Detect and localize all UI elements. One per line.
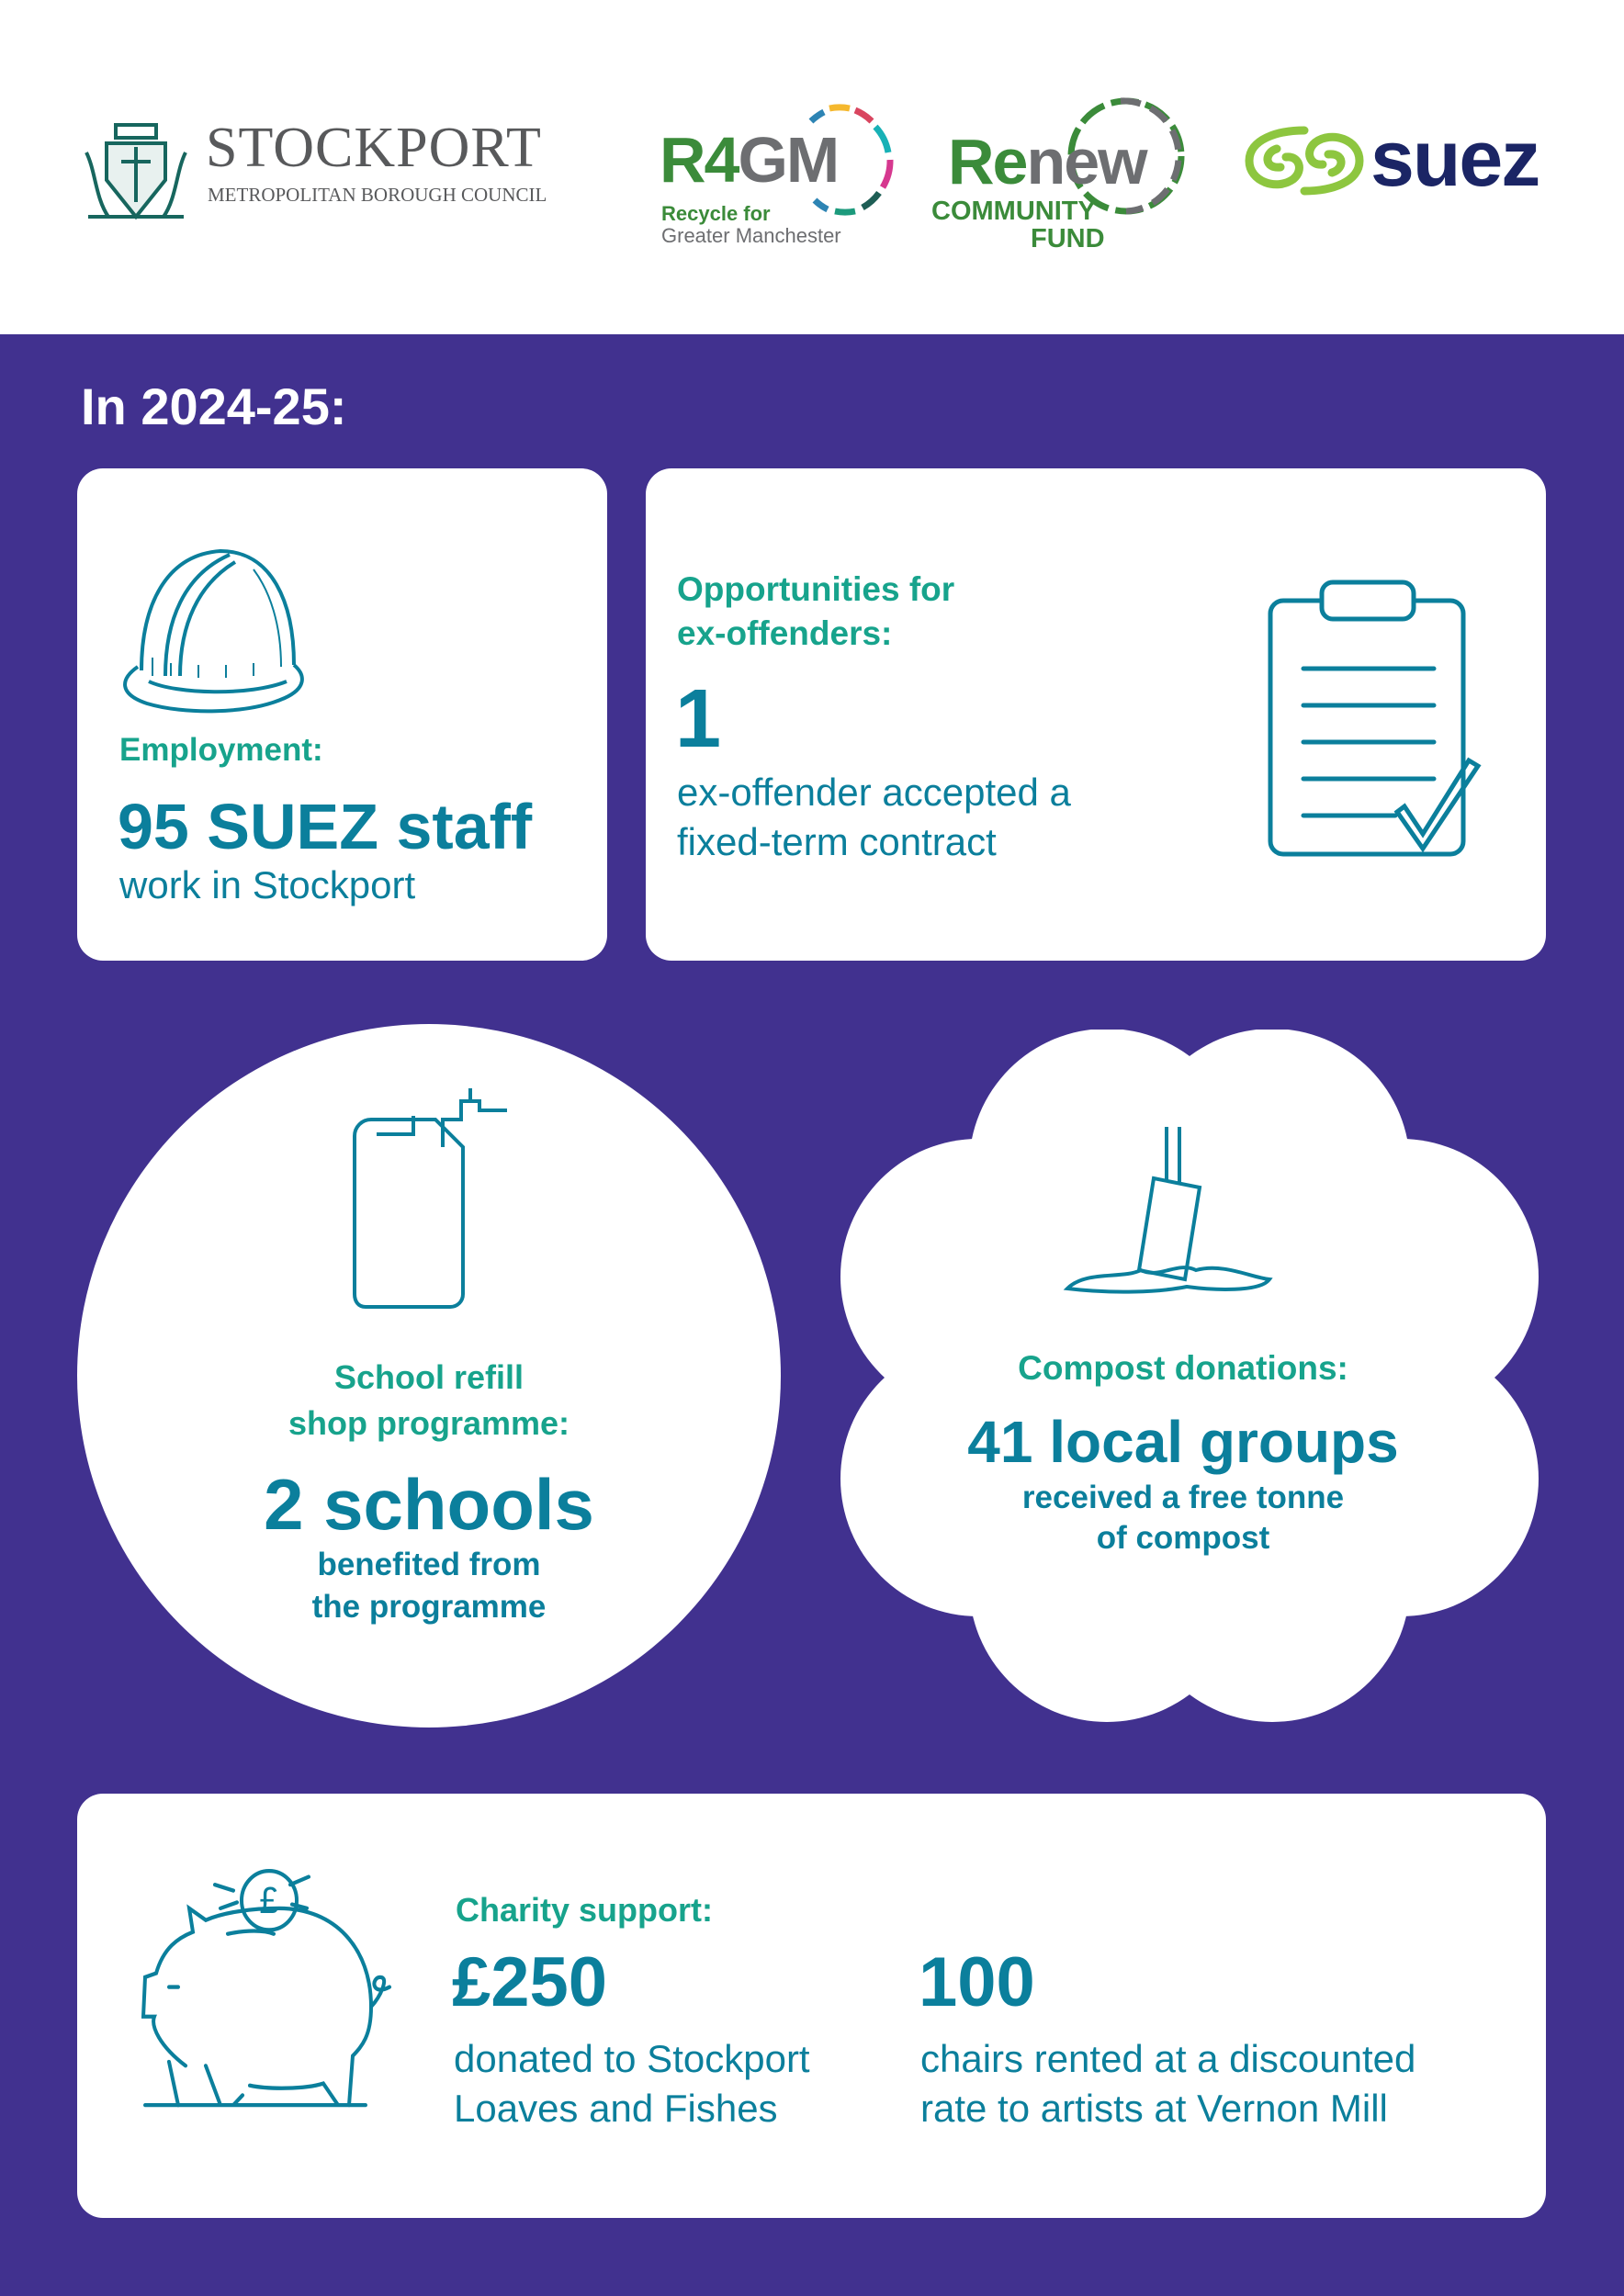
stat: £250: Loaves and Fishes [454,2087,778,2130]
icon: refill jug [353,1088,507,1309]
logo: Renew community fund: COMMUNITY [931,197,1096,226]
logo: stockport [85,117,547,220]
stat: 100 chairs: rate to artists at Vernon Mill [920,2087,1388,2130]
stat: 100 chairs: chairs rented at a discounted [920,2037,1415,2080]
text: charity heading: Charity support: [456,1891,713,1929]
logo: Renew community fund: Renew [948,126,1146,197]
stat: 100 chairs: 100 [919,1943,1035,2021]
logo: SUEZ: suez [1370,115,1539,203]
text: school refill [288,1358,570,1442]
panel: ex-offenders: 1 [675,673,721,765]
text: ex-offenders [677,570,954,652]
panel: employment: work in Stockport [119,863,415,906]
text: employment: Employment: [119,732,323,768]
panel: compost cloud [840,1030,1539,1722]
panel: school refill circle: 2 schools [264,1464,594,1545]
panel: employment: 95 SUEZ staff [118,791,532,862]
text: school refill: School refill [334,1358,524,1396]
title: In 2024-25: [81,377,347,435]
panel: ex-offenders: fixed-term contract [677,820,997,863]
stat: £250: donated to Stockport [454,2037,810,2080]
icon: shovel [1064,1127,1273,1294]
icon: hard hat [123,549,304,713]
panel: school refill circle: the programme [312,1589,546,1625]
logo: stockport: STOCKPORT [206,117,542,179]
logo: SUEZ [1246,115,1539,203]
logo: R4GM: Recycle for [661,202,771,225]
panel: school refill circle: benefited from [317,1547,541,1582]
panel: employment [77,468,607,961]
text: ex-offenders: ex-offenders: [677,614,892,652]
header logos [85,97,1539,253]
panel: compost cloud: received a free tonne [1022,1480,1344,1515]
stat: £250: £250 [452,1943,607,2021]
panel: school refill circle [77,1024,781,1728]
logo: Renew community fund [931,97,1185,253]
text: compost: Compost donations: [1018,1349,1348,1387]
text: school refill: shop programme: [288,1404,570,1442]
panel: ex-offenders: ex-offender accepted a [677,771,1071,814]
panel: charity support [77,1794,1546,2218]
stat: £250 [452,1943,810,2130]
logo: R4GM: R4GM [660,124,838,196]
icon: clipboard [1268,580,1481,856]
panel: compost cloud: 41 local groups [967,1409,1399,1475]
logo: R4GM: Greater Manchester [661,224,841,247]
text: ex-offenders: Opportunities for [677,570,954,608]
panel: ex-offenders [646,468,1546,961]
stat: 100 chairs [919,1943,1415,2130]
logo: Renew community fund: FUND [1031,224,1105,253]
icon: piggy bank: £ [259,1880,279,1922]
icon: piggy bank [141,1869,391,2107]
panel: compost cloud: of compost [1097,1520,1269,1556]
logo: stockport: METROPOLITAN BOROUGH COUNCIL [208,184,547,206]
logo: R4GM [660,104,893,247]
